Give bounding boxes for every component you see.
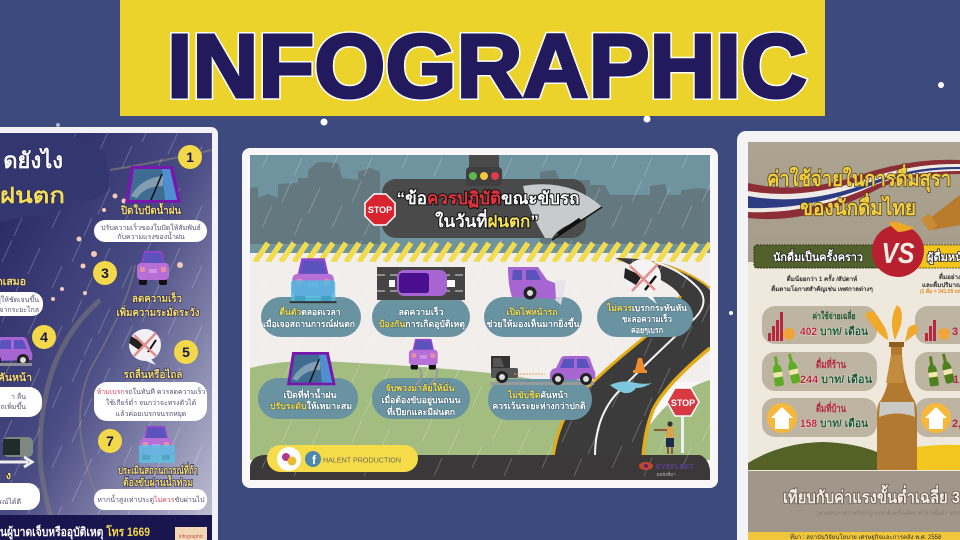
step 5 skid: แล้วค่อยเบรกจนรถหยุด <box>116 410 186 418</box>
tip 1: ตื่นตัวตลอดเวลา <box>279 305 340 317</box>
category descriptions: (1 ดื่ม = 341.05 ml <box>920 287 960 295</box>
badge 5: 5 <box>182 344 190 360</box>
eyefleet logo: EYEFLEET <box>656 462 694 471</box>
step 7 flood: หากน้ำสูงเท่าประตูไม่ควรขับผ่านไป <box>97 493 205 504</box>
banner heading: “ข้อควรปฏิบัติขณะขับรถ <box>397 189 579 208</box>
tip 4: ค่อยๆเบรก <box>631 325 663 336</box>
sky <box>250 155 710 260</box>
card: home spend: 158 บาท/ เดือน <box>800 417 868 430</box>
step 1 wiper: กับความแรงของน้ำฝน <box>117 230 185 241</box>
eyefleet logo <box>639 462 694 477</box>
heading: ดยังไง <box>3 147 63 173</box>
step 3 text: จากระยะไกล <box>0 305 39 314</box>
step 4 following distance: า ลื่น <box>11 392 26 401</box>
eyefleet logo: มหลังที่มา <box>656 471 676 477</box>
tip 4: ไม่ควรเบรกกระทันหัน <box>606 302 688 313</box>
right-column cards <box>915 306 960 437</box>
step 1 wiper: ปิดใบปัดน้ำฝน <box>120 202 182 217</box>
tip 6: ที่เปียกและมีฝนตก <box>387 405 455 417</box>
city silhouette <box>250 162 710 244</box>
category descriptions <box>771 272 960 295</box>
icon: no brake <box>129 329 161 365</box>
heading: ของนักดื่มไทย <box>800 192 916 220</box>
step 5 skid <box>94 329 207 421</box>
card: average spend: 402 บาท/ เดือน <box>800 325 868 338</box>
step 1 wiper <box>94 145 207 242</box>
panel: left rainy driving poster <box>0 127 218 540</box>
dark cloud heading backdrop <box>0 133 109 222</box>
tip 7: ควรเว้นระยะห่างกว่าปกติ <box>492 401 586 411</box>
green hill <box>250 361 710 460</box>
brand pill: HALENT PRODUCTION <box>323 456 401 464</box>
tip 5: เปิดที่ทำน้ำฝน <box>284 388 337 400</box>
VS badge: VS <box>882 238 915 270</box>
heading <box>767 163 951 220</box>
yellow category bar <box>905 245 960 268</box>
right-column cards: 3 <box>952 326 958 338</box>
title banner <box>382 155 602 240</box>
card: average spend: ค่าใช้จ่ายเฉลี่ย <box>812 309 856 321</box>
rain overlay <box>250 155 710 480</box>
decorative dots <box>56 82 944 315</box>
badge 3: 3 <box>101 265 109 281</box>
card: bar spend <box>762 352 877 391</box>
step 6 <box>0 437 40 510</box>
tip 3: ช่วยให้มองเห็นมากยิ่งขึ้น <box>486 317 580 329</box>
step 7 flood <box>94 426 207 510</box>
step 2 slow down: เพิ่มความระมัดระวัง <box>116 304 200 319</box>
step 2 slow down: ลดความเร็ว <box>132 291 182 305</box>
footer hotline bar: Infographic <box>179 534 204 540</box>
tip 6: จับพวงมาลัยให้มั่น <box>386 381 455 393</box>
tip 4: ชะลอความเร็ว <box>622 312 672 324</box>
green category bar: นักดื่มเป็นครั้งคราว <box>773 249 863 264</box>
icon: stop sign <box>365 194 395 225</box>
step 4 following distance <box>0 325 56 417</box>
ground <box>250 262 710 382</box>
category descriptions: ดื่มน้อยกว่า 1 ครั้ง /สัปดาห์ <box>787 273 857 283</box>
card: home spend <box>762 398 877 437</box>
brand pill <box>267 445 418 472</box>
panel: right alcohol spending poster <box>737 131 960 540</box>
VS badge <box>872 222 924 277</box>
icon: side car <box>0 337 32 366</box>
tip 1: เมื่อเจอสถานการณ์ฝนตก <box>263 317 355 329</box>
card: bar spend: ดื่มที่ร้าน <box>816 357 846 371</box>
icon: bar chart <box>768 312 795 341</box>
icon: car with headlights <box>508 267 566 305</box>
icon: traffic cone <box>633 358 647 373</box>
heading: ฝนตก <box>0 183 65 208</box>
dark foreground road <box>250 455 710 480</box>
heading <box>0 147 65 208</box>
tip 2: ป้องกันการเกิดอุบัติเหตุ <box>379 319 465 330</box>
icon: wiper <box>125 166 181 203</box>
wiper fan <box>523 184 602 238</box>
icon: pouring bottle <box>921 195 960 231</box>
icon: car on road <box>377 267 465 300</box>
card: average spend <box>762 306 877 344</box>
hills <box>748 442 877 470</box>
sparkles <box>51 194 183 301</box>
panel: centre rainy-day driving poster <box>242 148 718 488</box>
tip 7 <box>488 356 595 420</box>
step 7 flood: ต้องขับผ่านน้ำท่วม <box>123 474 193 489</box>
icon: car with tyre tracks <box>409 339 438 385</box>
tip 6 <box>372 339 470 419</box>
icon: facebook: f <box>312 453 317 467</box>
step 5 skid: ห้ามเบรกรถในทันที ควรลดความเร็ว <box>97 387 205 396</box>
title: INFOGRAPHIC <box>167 17 807 117</box>
traffic light front <box>466 167 502 186</box>
tip 6: เมื่อต้องขับอยู่บนถนน <box>382 393 461 406</box>
badge 1: 1 <box>186 149 194 165</box>
banner heading: ในวันที่ฝนตก” <box>435 209 539 231</box>
logo <box>277 447 301 471</box>
tip 3 <box>484 267 582 337</box>
badge 7: 7 <box>106 433 114 449</box>
title banner <box>120 0 825 117</box>
tip 1 <box>261 258 361 337</box>
step 1 wiper: ปรับความเร็วของใบปัดให้สัมพันธ์ <box>101 223 201 232</box>
icon: truck and car with gap <box>490 356 595 385</box>
icon: beer bottle <box>877 342 917 470</box>
banner heading <box>397 189 579 231</box>
footer hotline bar <box>0 515 212 540</box>
icon: car in water <box>139 426 175 463</box>
icon: traffic officer <box>654 421 674 454</box>
icon: facebook <box>305 451 321 467</box>
card: bar spend: 244 บาท/ เดือน <box>800 373 872 386</box>
icon: stop sign: STOP <box>368 205 392 215</box>
icon: house <box>767 403 797 433</box>
right-column cards: 1 <box>953 374 959 386</box>
tip 2 <box>372 267 470 337</box>
icon: puddle <box>610 381 652 393</box>
tip 5: ปรับระดับให้เหมาะสม <box>270 400 352 411</box>
icon: wiper <box>287 352 336 385</box>
step 2 slow down <box>116 251 200 319</box>
tip 7: ไม่ขับชิดคันหน้า <box>507 389 568 400</box>
tip 3: เปิดไฟหน้ารถ <box>506 306 558 317</box>
icon: beer splash <box>865 305 918 342</box>
badge 3 <box>93 261 117 285</box>
traffic light post <box>469 155 499 168</box>
comparison panel <box>748 471 960 532</box>
icon: road stop sign: STOP <box>671 398 695 408</box>
ribbon: Thai flag <box>748 160 960 219</box>
tip 5 <box>258 352 358 419</box>
hazard stripes <box>250 243 710 263</box>
step 5 skid: รถลื่นหรือไถล <box>124 366 182 381</box>
card: home spend: ดื่มที่บ้าน <box>816 401 846 415</box>
tip 4 <box>597 259 693 337</box>
icon: green bottles <box>771 353 801 387</box>
step 6: ง <box>6 470 11 482</box>
icon: road stop sign <box>667 388 699 453</box>
road <box>553 258 710 457</box>
source strip <box>748 532 960 540</box>
title: INFOGRAPHIC <box>167 17 807 117</box>
icon: no sudden brake <box>624 259 661 304</box>
tip 2: ลดความเร็ว <box>398 305 444 317</box>
step 5 skid: ใช้เกียร์ต่ำ จนกว่าจะทรงตัวได้ <box>106 398 196 407</box>
green category bar <box>754 245 889 268</box>
step 7 flood: ประเมินสถานการณ์ที่ถ้า <box>118 462 198 477</box>
icon: car and arrow <box>0 437 33 467</box>
category descriptions: ดื่มตามโอกาสสำคัญเช่น เทศกาลต่างๆ <box>771 284 873 293</box>
icon: car <box>137 251 169 285</box>
badge 4: 4 <box>40 329 48 345</box>
footer hotline bar: นผู้บาดเจ็บหรืออุบัติเหตุ โทร 1669 <box>0 524 150 540</box>
icon: flooded car <box>290 258 336 303</box>
step 3 text <box>0 276 43 316</box>
